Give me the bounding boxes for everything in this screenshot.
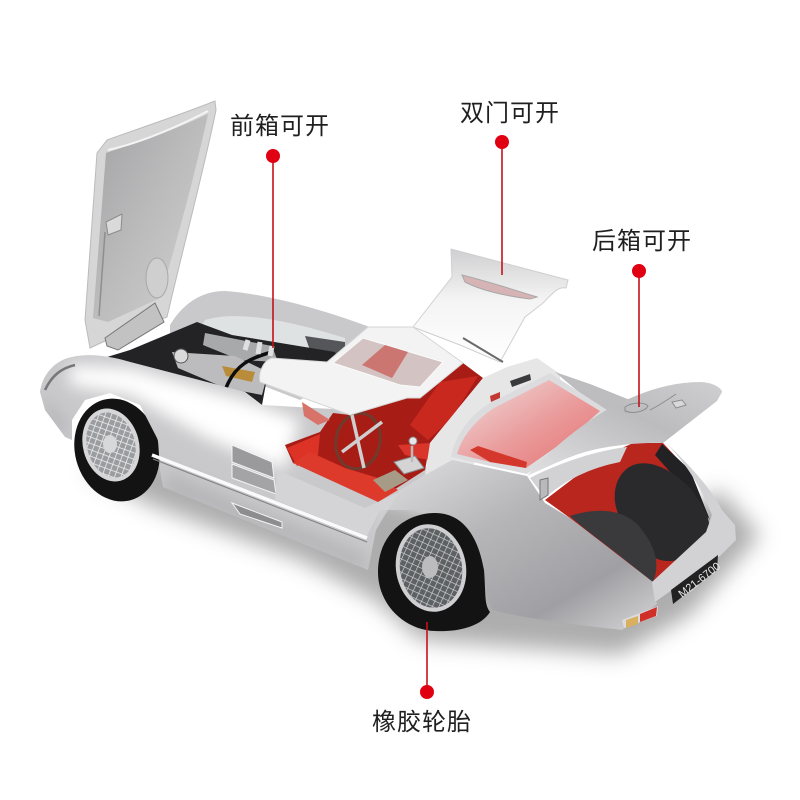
callout: rubber tyres: 橡胶轮胎 bbox=[372, 709, 472, 736]
tail light bbox=[622, 606, 658, 628]
near gullwing door with roof and windscreen bbox=[260, 327, 463, 415]
infographic: model car with feature callouts bbox=[40, 100, 768, 732]
rear fender bbox=[370, 460, 657, 630]
licence plate: M21-6700 bbox=[676, 560, 723, 600]
red interior bbox=[285, 363, 483, 502]
engine bay bbox=[107, 322, 345, 405]
callout: rear trunk opens: 后箱可开 bbox=[592, 228, 692, 255]
side trim bbox=[152, 455, 367, 538]
ground shadow bbox=[85, 450, 760, 655]
steering wheel bbox=[331, 409, 385, 473]
small side window bbox=[302, 402, 330, 425]
hood hinge bbox=[105, 303, 164, 350]
rear pillar and rear roof bbox=[425, 358, 560, 475]
nose edge shading bbox=[45, 365, 75, 390]
open trunk lid bbox=[527, 382, 722, 500]
main car body, front and mid section bbox=[40, 355, 430, 575]
trunk rim bbox=[652, 442, 736, 602]
rear deck bbox=[555, 372, 640, 440]
side vents bbox=[232, 445, 274, 478]
callout: both doors open: 双门可开 bbox=[460, 100, 560, 127]
lower door sill bbox=[275, 470, 425, 536]
far side fender bbox=[170, 291, 400, 400]
callout: front trunk opens bbox=[230, 113, 330, 348]
gear lever bbox=[394, 437, 424, 474]
open front hood bbox=[85, 101, 216, 350]
callout: front trunk opens: 前箱可开 bbox=[230, 113, 330, 140]
rear window bbox=[451, 373, 607, 474]
callout: rubber tyres bbox=[372, 622, 472, 736]
far gullwing door, raised bbox=[413, 249, 568, 362]
callout: rear trunk opens bbox=[592, 228, 692, 407]
front wheel bbox=[63, 389, 171, 511]
spare tyre upright bbox=[615, 463, 709, 561]
callout: both doors open bbox=[460, 100, 560, 275]
spare tyre flat bbox=[570, 511, 656, 582]
trunk opening bbox=[530, 443, 710, 582]
rear wheel bbox=[378, 513, 490, 631]
